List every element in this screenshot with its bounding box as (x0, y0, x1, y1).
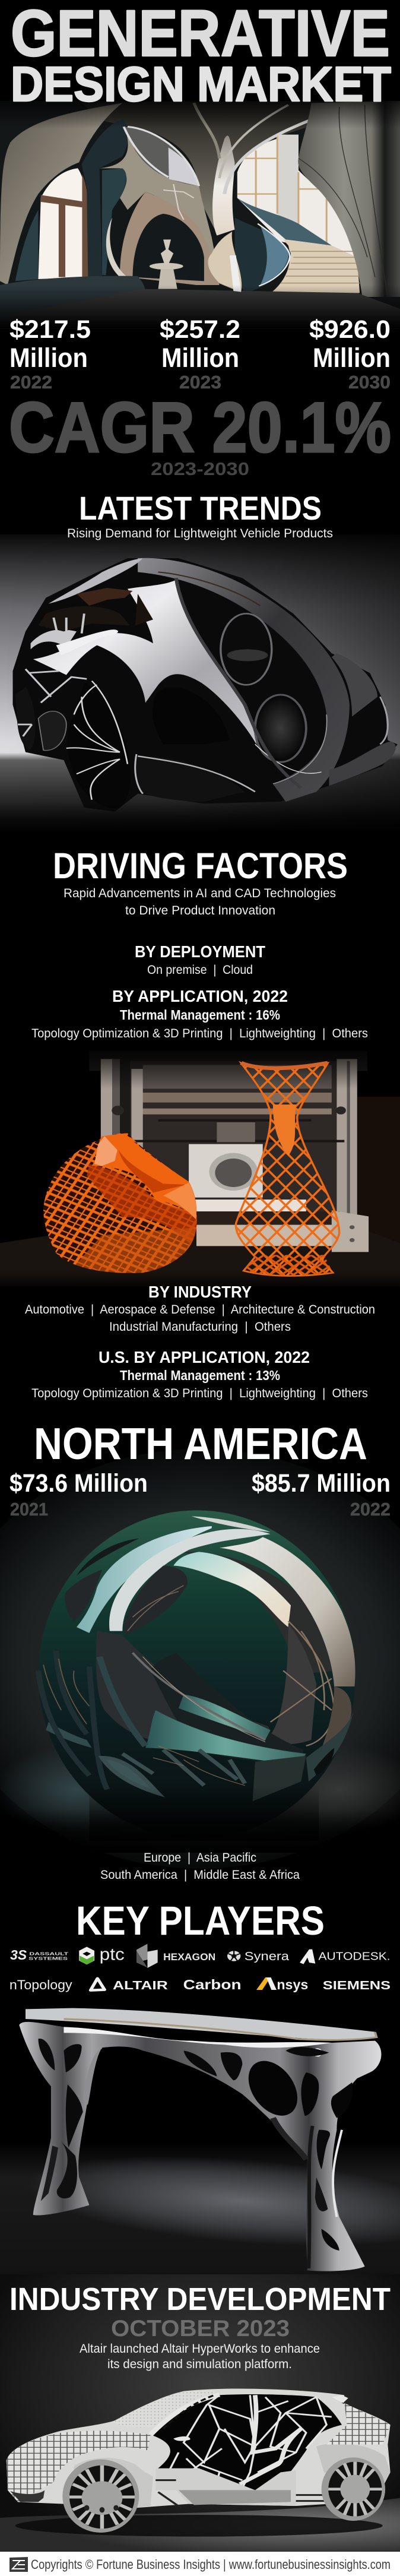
front wheel (62, 2460, 139, 2533)
trend description: Rising Demand for Lightweight Vehicle Products (67, 527, 333, 540)
logo: Dassault Systemes: SYSTEMES (28, 1956, 68, 1961)
icon: Fortune Business Insights mark (9, 2557, 28, 2572)
logo: Autodesk (300, 1950, 391, 1964)
stat: 2023 market size (160, 315, 240, 393)
segment: U.S. by application: Thermal Management : 13% (120, 1368, 280, 1383)
stat: North America 2021: 2021 (10, 1499, 48, 1520)
footer (0, 2552, 400, 2576)
segment: by industry (25, 1283, 375, 1334)
stat: North America 2022: 2022 (350, 1499, 391, 1520)
vase-shaped lattice (236, 1063, 339, 1276)
logo: Autodesk: AUTODESK. (318, 1951, 391, 1963)
other regions list: Europe | Asia Pacific (144, 1851, 256, 1865)
CAGR callout: 2023-2030 (151, 458, 249, 479)
logo: PTC: ptc (100, 1945, 125, 1964)
stat: North America 2021 (9, 1469, 148, 1520)
segment: by deployment (135, 942, 265, 977)
logo: Hexagon (136, 1944, 215, 1968)
logo: Altair: ALTAIR (113, 1979, 168, 1992)
stat: North America 2022 (252, 1469, 391, 1520)
lattice car body (7, 2388, 391, 2508)
stat: 2023 market size: $257.2 (160, 315, 240, 344)
rear wheel (322, 2457, 385, 2521)
segment: by application: Topology Optimization & 3D Printing | Lightweighting | Others (31, 1027, 368, 1040)
key player logos (9, 1944, 391, 1992)
stat: North America 2021: $73.6 Million (9, 1469, 148, 1498)
helmet-shaped lattice (43, 1133, 204, 1275)
logo: Carbon: Carbon (183, 1977, 242, 1992)
stat: 2022 market size: Million (9, 343, 88, 373)
logo: nTopology: nTopology (9, 1978, 72, 1992)
stat: 2023 market size: Million (161, 343, 239, 373)
logo: Ansys (255, 1976, 308, 1992)
development description (80, 2342, 320, 2371)
heading: key players: KEY PLAYERS (76, 1898, 325, 1944)
segment: by application (31, 987, 368, 1040)
development description: Altair launched Altair HyperWorks to enhance (80, 2342, 320, 2356)
stat: 2030 market size: Million (313, 343, 391, 373)
logo: Siemens: SIEMENS (323, 1979, 391, 1992)
driving factor description: Rapid Advancements in AI and CAD Technologies (64, 887, 336, 900)
logo: Hexagon: HEXAGON (163, 1952, 215, 1963)
driving factor description (64, 887, 336, 917)
other regions list: South America | Middle East & Africa (100, 1868, 300, 1882)
segment: U.S. by application: U.S. BY APPLICATION, 2022 (99, 1348, 310, 1366)
stat: 2022 market size (9, 315, 91, 393)
stat: 2023 market size: 2023 (179, 372, 221, 393)
stat: 2030 market size (309, 315, 391, 393)
image: generative concept car (0, 534, 400, 831)
other regions list (100, 1851, 300, 1882)
logo: Synera: Synera (245, 1950, 290, 1963)
hero image: sculptural interior (0, 99, 400, 328)
image: metallic lattice sphere (0, 1449, 400, 1869)
logo: Dassault Systemes: 3S (10, 1947, 27, 1963)
segment: by application: Thermal Management : 16% (120, 1007, 280, 1023)
logo: PTC (79, 1945, 125, 1964)
segment: U.S. by application (31, 1348, 368, 1400)
logo: Synera (227, 1950, 290, 1963)
logo: Dassault Systemes (10, 1947, 69, 1963)
heading: driving factors: DRIVING FACTORS (53, 846, 348, 886)
stat: 2030 market size: $926.0 (309, 315, 391, 344)
stat: 2030 market size: 2030 (348, 372, 391, 393)
segment: by deployment: On premise | Cloud (147, 963, 253, 977)
logo: Ansys: Ansys (267, 1977, 308, 1992)
segment: by industry: Industrial Manufacturing | Others (109, 1320, 291, 1334)
stat: 2022 market size: $217.5 (9, 315, 91, 344)
heading: latest trends: LATEST TRENDS (79, 489, 322, 527)
image: orange 3D printed lattice objects (0, 1049, 400, 1290)
segment: by industry: BY INDUSTRY (148, 1283, 252, 1301)
stat: 2022 market size: 2022 (10, 372, 52, 393)
segment: by industry: Automotive | Aerospace & Defense | Architecture & Construction (25, 1303, 375, 1317)
date: October 2023: OCTOBER 2023 (111, 2316, 290, 2341)
stat: North America 2022: $85.7 Million (252, 1469, 391, 1498)
title (11, 0, 391, 112)
heading: North America: NORTH AMERICA (34, 1419, 367, 1469)
logo: Dassault Systemes: DASSAULT (29, 1951, 69, 1956)
development description: its design and simulation platform. (107, 2357, 292, 2371)
image: industry development background and lattice car (0, 2274, 400, 2552)
driving factor description: to Drive Product Innovation (125, 904, 275, 917)
image: generative metal console table (0, 2008, 400, 2286)
segment: by application: BY APPLICATION, 2022 (112, 987, 288, 1005)
segment: by deployment: BY DEPLOYMENT (135, 942, 265, 961)
segment: U.S. by application: Topology Optimization & 3D Printing | Lightweighting | Others (31, 1387, 368, 1400)
